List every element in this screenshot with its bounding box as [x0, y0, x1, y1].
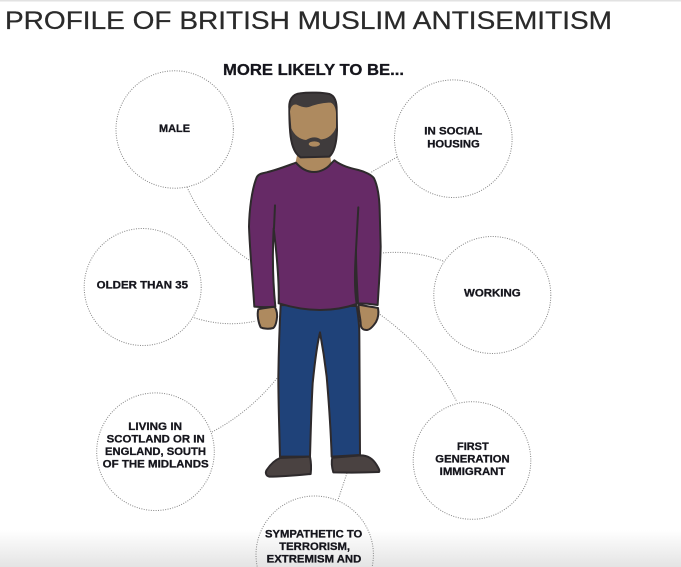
bubble: first generation immigrant: [413, 402, 531, 519]
figure of a bearded man: [249, 93, 381, 477]
subheading: MORE LIKELY TO BE...: [223, 62, 404, 79]
bubble: sympathetic to terrorism, extremism and (cropped): [256, 496, 373, 566]
figure: trousers: [278, 305, 360, 457]
figure: jumper: [249, 160, 381, 310]
title: PROFILE OF BRITISH MUSLIM ANTISEMITISM: [5, 7, 612, 35]
figure: hair and beard: [289, 93, 337, 157]
connector lines: [187, 157, 457, 500]
bubble: living in Scotland or southern England: SCOTLAND OR IN: [107, 434, 205, 446]
bubble: male: [116, 71, 233, 188]
bubble: first generation immigrant: IMMIGRANT: [440, 466, 506, 478]
bubble: sympathetic to terrorism, extremism and (cropped): SYMPATHETIC TO: [265, 528, 363, 540]
bubble: in social housing: HOUSING: [427, 138, 480, 150]
bubble: older than 35: [84, 228, 201, 346]
bubble: sympathetic to terrorism, extremism and (cropped): TERRORISM,: [279, 541, 350, 553]
bubble: living in Scotland or southern England: LIVING IN: [128, 421, 182, 433]
figure: hands: [258, 305, 378, 330]
figure: neck: [295, 154, 331, 178]
bubble: working: WORKING: [464, 288, 521, 300]
bubble: living in Scotland or southern England: ENGLAND, SOUTH: [105, 446, 206, 458]
figure: face: [290, 103, 336, 147]
bubble: sympathetic to terrorism, extremism and (cropped): EXTREMISM AND: [267, 554, 361, 566]
bubble: older than 35: OLDER THAN 35: [97, 280, 188, 292]
bubble: living in Scotland or southern England: OF THE MIDLANDS: [103, 459, 209, 471]
bubble: first generation immigrant: GENERATION: [435, 453, 510, 465]
figure: shoes: [266, 455, 379, 477]
bubble: working: [434, 236, 551, 354]
bubble: in social housing: IN SOCIAL: [424, 126, 483, 138]
bubble: male: MALE: [159, 123, 190, 135]
bubble: living in Scotland or southern England: [97, 393, 214, 511]
bubble: first generation immigrant: FIRST: [457, 441, 489, 453]
bubble: in social housing: [394, 80, 512, 198]
